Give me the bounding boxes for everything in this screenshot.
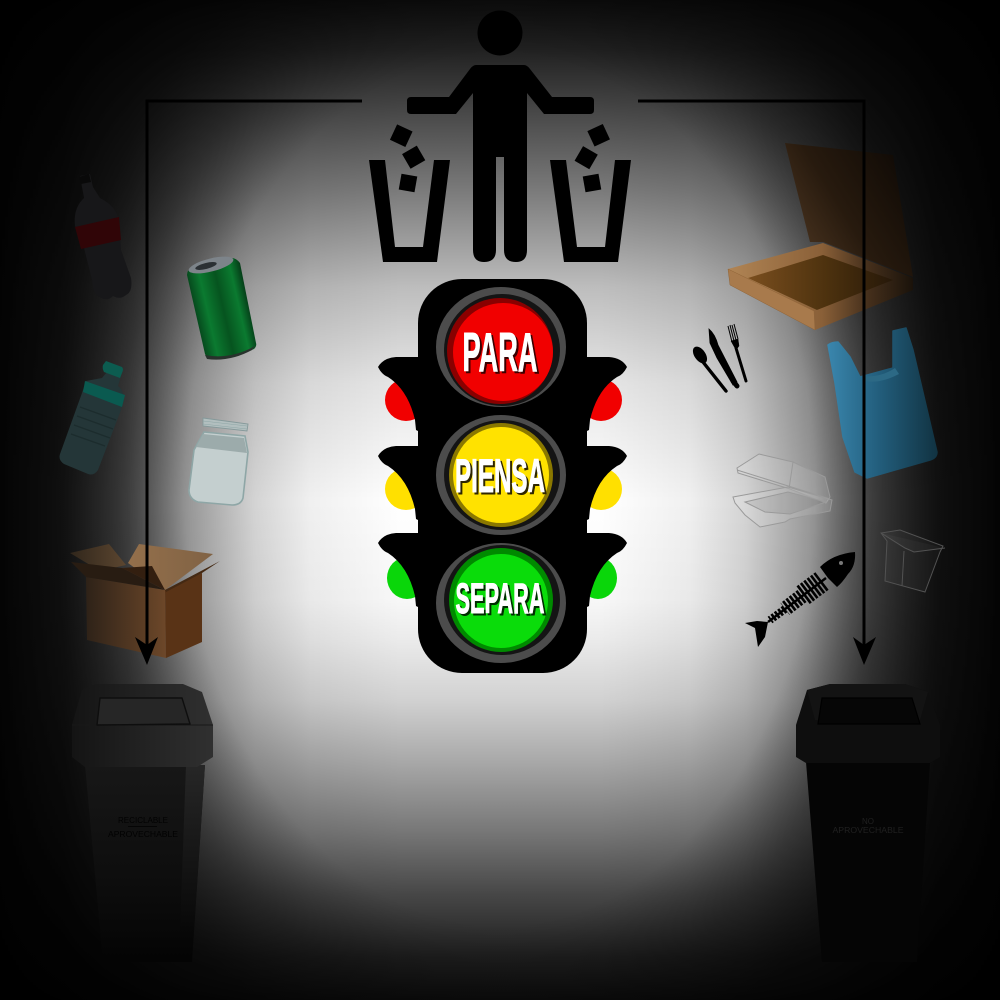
icon: cardboard box bbox=[70, 544, 220, 658]
icon: foam clamshell bbox=[733, 454, 832, 527]
light: separa bbox=[436, 543, 566, 663]
icon: takeout box bbox=[881, 530, 945, 592]
side lamps bbox=[385, 379, 622, 599]
icon: fish skeleton bbox=[745, 552, 855, 647]
light: piensa bbox=[436, 415, 566, 535]
icon: soda bottle bbox=[75, 174, 131, 299]
light: para: PARA bbox=[462, 321, 538, 383]
right bin bbox=[550, 160, 631, 262]
left bin bbox=[369, 160, 450, 262]
icon: plastic bag bbox=[828, 328, 937, 478]
spoon bbox=[690, 344, 726, 391]
light: para: PARA bbox=[464, 323, 540, 385]
bin label: recyclable bbox=[108, 816, 178, 839]
light: separa: SEPARA bbox=[456, 575, 544, 623]
icon: green can bbox=[187, 253, 256, 360]
icon: plastic cutlery bbox=[690, 324, 746, 391]
icon: glass jar bbox=[189, 418, 248, 505]
bin: non-recyclable bbox=[796, 684, 940, 962]
panel: non-recyclable objects bbox=[690, 143, 945, 647]
bin label: non-recyclable: APROVECHABLE bbox=[832, 826, 904, 835]
right falling waste bbox=[575, 124, 610, 192]
bin label: recyclable: APROVECHABLE bbox=[108, 830, 178, 839]
knife bbox=[709, 329, 737, 386]
light: para bbox=[436, 287, 566, 407]
bin label: non-recyclable bbox=[832, 817, 904, 835]
bin label: recyclable: RECICLABLE bbox=[118, 816, 168, 825]
icon: water bottle bbox=[60, 361, 125, 474]
housing bbox=[378, 279, 627, 673]
light: piensa: PIENSA bbox=[457, 451, 547, 504]
light: separa: SEPARA bbox=[458, 577, 546, 625]
icon: pizza box bbox=[728, 143, 913, 330]
fork bbox=[728, 324, 746, 381]
bin: recyclable bbox=[72, 684, 213, 962]
icon: person throwing waste into two bins bbox=[369, 10, 631, 262]
bin label: non-recyclable: NO bbox=[862, 817, 874, 826]
person bbox=[407, 10, 594, 262]
panel: recyclable objects bbox=[60, 174, 256, 658]
traffic light bbox=[378, 279, 627, 673]
arrow: right to non-recyclable bin bbox=[638, 101, 876, 665]
left falling waste bbox=[390, 124, 425, 192]
arrow: left to recyclable bin bbox=[135, 101, 362, 665]
light: piensa: PIENSA bbox=[455, 449, 545, 502]
